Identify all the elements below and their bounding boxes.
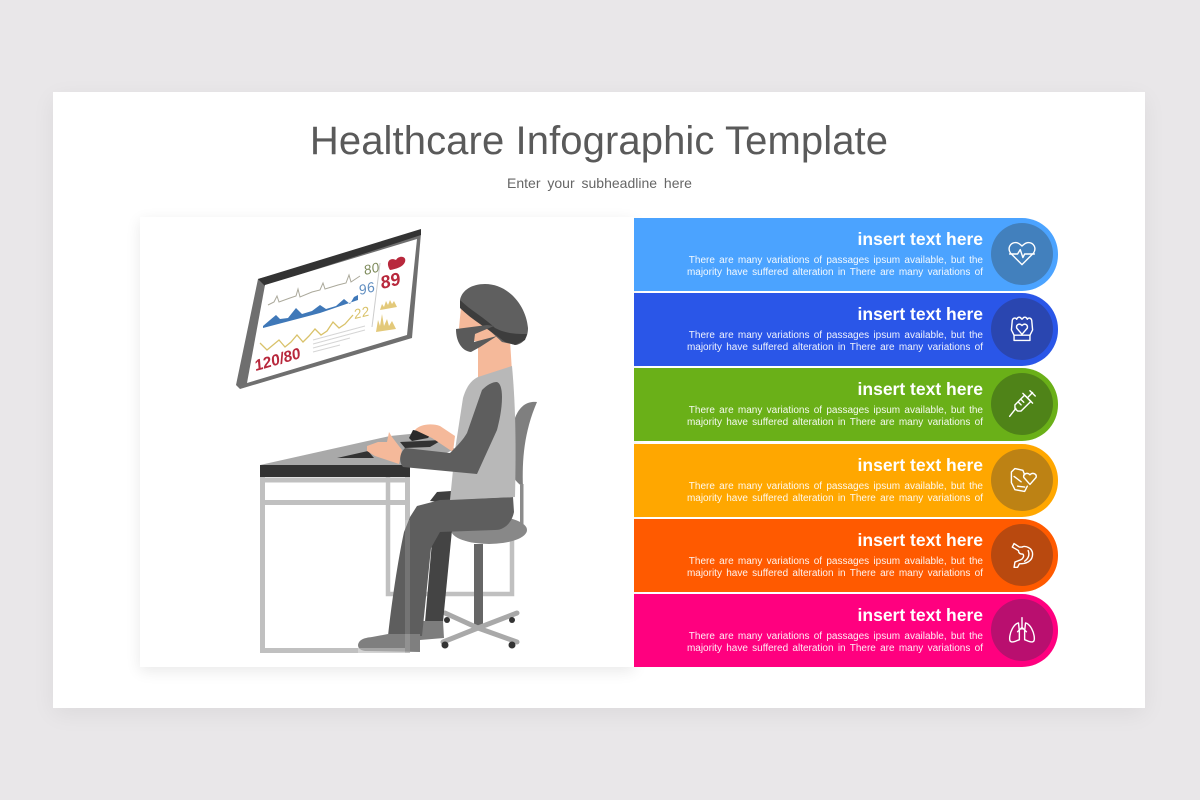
icon: syringe [991, 373, 1053, 435]
item 2: indigo bar [634, 293, 1058, 366]
text 6 [687, 630, 984, 654]
title: Healthcare Infographic Template [310, 119, 888, 163]
text 6: There are many variations of passages ipsum available, but the [689, 630, 983, 642]
monitor: yellow wave [260, 315, 353, 350]
text 5 [687, 556, 984, 579]
item 4: amber bar [634, 444, 1058, 516]
subtitle: Enter your subheadline here [507, 175, 692, 191]
arm sleeve [400, 382, 502, 474]
heading 1: insert text here [858, 229, 983, 249]
monitor: ECG trace [268, 275, 360, 305]
icon: stomach [991, 524, 1053, 586]
text 1: There are many variations of passages ipsum available, but the [689, 254, 983, 266]
item 3: green bar [634, 368, 1058, 440]
far leg [420, 491, 452, 640]
icon: heart with pulse [991, 223, 1053, 285]
desk: mouse [409, 430, 432, 441]
head: cap band [460, 300, 527, 345]
text 4: majority have suffered alteration in There are many variations of [687, 493, 983, 504]
text 3: There are many variations of passages ipsum available, but the [689, 404, 983, 416]
text 1: majority have suffered alteration in There are many variations of [687, 267, 983, 278]
icon: medical bag with heart [991, 449, 1053, 511]
text 2 [687, 330, 984, 353]
item 1: blue bar [634, 218, 1058, 290]
far hand [415, 424, 455, 452]
chair back [508, 402, 537, 524]
desk: keyboard [337, 451, 374, 458]
monitor: small charts [380, 300, 397, 310]
monitor: readings: 22 [351, 303, 371, 322]
monitor: readings: 89 [378, 269, 402, 293]
text 2: There are many variations of passages ipsum available, but the [689, 330, 983, 340]
heading 4: insert text here [858, 455, 983, 475]
head: mask [456, 325, 497, 352]
near leg [358, 497, 514, 652]
neck [478, 340, 512, 380]
item 5: orange bar [634, 519, 1058, 592]
text 1 [687, 254, 984, 278]
monitor: heart [388, 257, 405, 270]
desk back frame [388, 477, 512, 594]
text 2: majority have suffered alteration in There are many variations of [687, 342, 983, 353]
monitor: blue waveform [263, 295, 358, 328]
desk [260, 430, 455, 477]
head: cap [460, 284, 528, 345]
heading 2: insert text here [858, 304, 983, 324]
heading 5: insert text here [858, 530, 983, 550]
panel: illustration background [140, 217, 634, 667]
monitor: readings: 120/80 [252, 345, 303, 375]
torso vest [450, 366, 516, 500]
monitor: readings: 80 [362, 259, 381, 278]
heading 3: insert text here [858, 379, 983, 399]
heading 6: insert text here [858, 605, 983, 625]
desk front frame [262, 477, 408, 650]
item 6: magenta bar [634, 594, 1058, 666]
monitor [236, 229, 421, 389]
text 4 [687, 480, 984, 504]
text 4: There are many variations of passages ipsum available, but the [689, 480, 983, 492]
stool [442, 516, 527, 648]
text 3: majority have suffered alteration in There are many variations of [687, 417, 983, 428]
text 5: majority have suffered alteration in There are many variations of [687, 568, 983, 579]
near hand [367, 432, 402, 464]
text 3 [687, 404, 984, 428]
head [456, 284, 528, 352]
monitor: readings: 96 [357, 278, 377, 298]
icon: lungs [991, 599, 1053, 661]
monitor: text lines [313, 326, 365, 352]
slide card [53, 92, 1145, 708]
icon: hands holding heart [991, 298, 1053, 360]
text 6: majority have suffered alteration in There are many variations of [687, 643, 983, 654]
text 5: There are many variations of passages ipsum available, but the [689, 556, 983, 566]
monitor: readings [252, 259, 402, 375]
